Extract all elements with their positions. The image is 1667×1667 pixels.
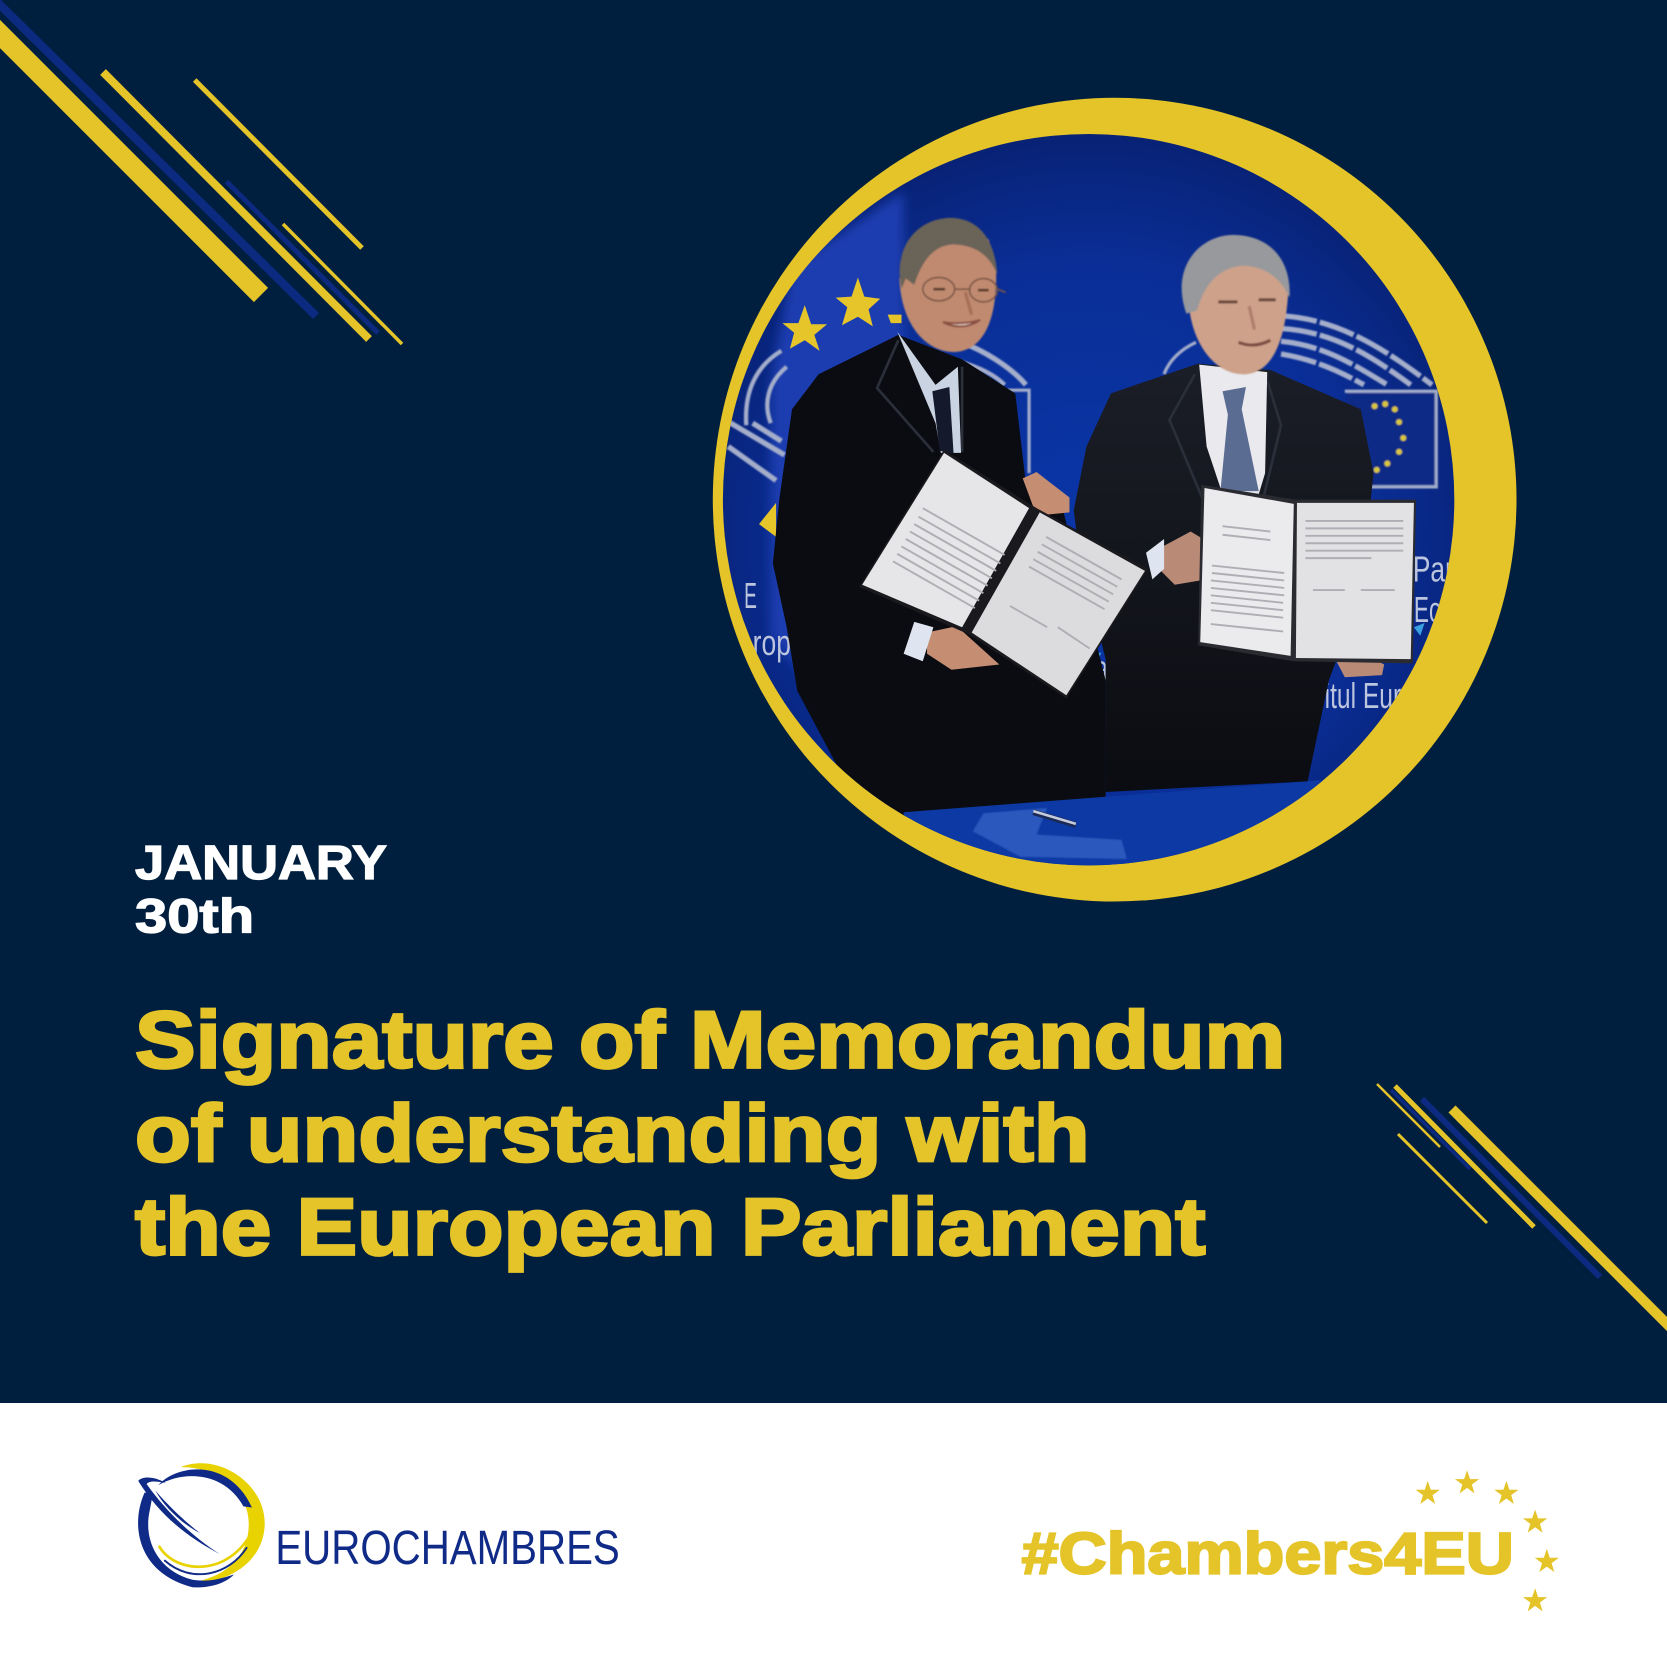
date: 30th	[135, 890, 254, 943]
photo backdrop	[712, 128, 1467, 872]
yellow crescent circle	[713, 98, 1517, 902]
right man suit	[1074, 364, 1374, 792]
left document	[859, 450, 1148, 698]
logo wordmark: EUROCHAMBRES	[275, 1522, 620, 1575]
circular photo: two men holding signed memorandum	[712, 128, 1467, 882]
left man suit	[773, 335, 1106, 819]
cyan backdrop marks	[1098, 623, 1424, 656]
backdrop lettering: a	[1095, 647, 1108, 688]
flag stars	[759, 277, 902, 537]
title	[135, 995, 1285, 1272]
left man head	[899, 218, 1006, 352]
main scaled layer	[135, 98, 1559, 1611]
title: the European Parliament	[135, 1182, 1206, 1272]
logo ring	[138, 1463, 265, 1587]
title: of understanding with	[135, 1089, 1090, 1179]
hashtag: #Chambers4EU	[1022, 1521, 1514, 1586]
right document	[1198, 485, 1416, 663]
white footer band	[0, 1403, 1667, 1667]
right man hands and cuffs	[1146, 532, 1384, 677]
left man hands and cuffs	[904, 472, 1069, 670]
stars arc	[1416, 1470, 1559, 1611]
backdrop lettering: itul Eur	[1325, 675, 1401, 716]
lapel shading	[876, 340, 1282, 498]
left man shirt and tie	[897, 332, 961, 454]
backdrop parliament logo left	[726, 344, 1032, 484]
table with pen	[904, 780, 1324, 866]
title: Signature of Memorandum	[135, 995, 1285, 1085]
backdrop parliament logo and EU flag right	[1164, 316, 1436, 487]
backdrop lettering	[746, 556, 1449, 708]
date: JANUARY	[135, 837, 387, 890]
right man shirt and tie	[1199, 365, 1267, 494]
backdrop lettering: E	[744, 575, 757, 616]
date	[135, 837, 387, 943]
EU flag behind left man	[771, 191, 904, 680]
backdrop lettering: Eo	[1414, 589, 1442, 630]
backdrop lettering: Parl	[1413, 549, 1460, 590]
Eurochambres logo	[138, 1463, 620, 1587]
decorative diagonal lines bottom right	[1377, 1084, 1667, 1337]
right man head	[1182, 235, 1290, 374]
backdrop lettering: rop	[753, 622, 791, 663]
decorative diagonal lines top left	[0, 0, 402, 344]
